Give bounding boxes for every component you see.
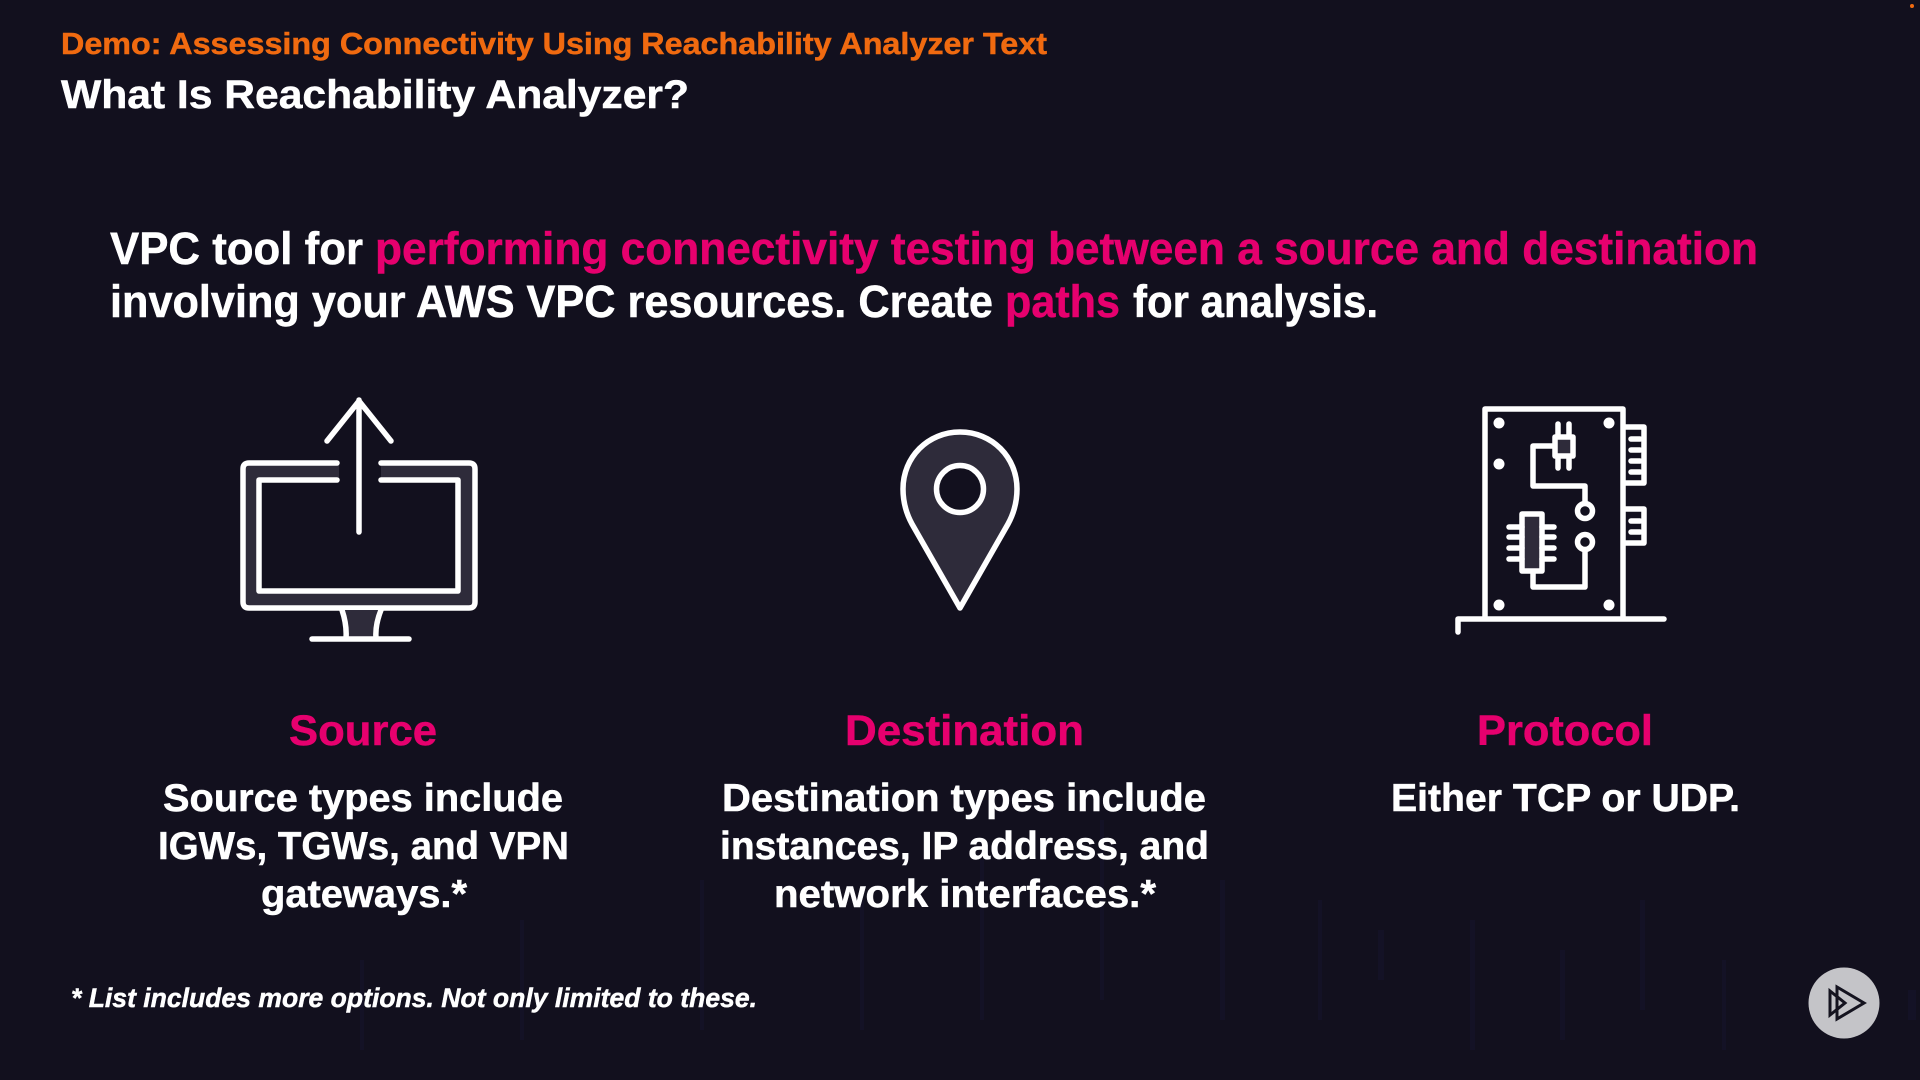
- icon: map pin: [903, 432, 1017, 608]
- panel: source: [158, 707, 569, 916]
- icon: circuit board: [1458, 409, 1664, 632]
- panel: destination: [720, 707, 1209, 916]
- intro text: involving your AWS VPC resources. Create: [110, 276, 993, 327]
- source description: [158, 777, 569, 916]
- destination description: network interfaces.*: [774, 873, 1157, 916]
- footnote: * List includes more options. Not only limited to these.: [71, 983, 757, 1013]
- intro text: paths: [1005, 276, 1120, 327]
- protocol description: Either TCP or UDP.: [1391, 777, 1740, 820]
- destination heading: Destination: [845, 707, 1084, 755]
- destination description: Destination types include: [722, 777, 1206, 820]
- protocol heading: Protocol: [1477, 707, 1653, 755]
- intro text: VPC tool for: [110, 223, 363, 274]
- slide heading: What Is Reachability Analyzer?: [61, 73, 689, 117]
- icon: monitor with upload arrow: [243, 400, 475, 639]
- module title: Demo: Assessing Connectivity Using Reachability Analyzer Text: [61, 26, 1047, 61]
- icon: play logo button: [1808, 968, 1880, 1038]
- source heading: Source: [289, 707, 437, 755]
- source description: IGWs, TGWs, and VPN: [158, 825, 569, 868]
- intro text: [110, 223, 1758, 327]
- intro text: for analysis.: [1133, 276, 1378, 327]
- source description: gateways.*: [261, 873, 468, 916]
- destination description: [720, 777, 1209, 916]
- panel: protocol: [1391, 707, 1740, 820]
- destination description: instances, IP address, and: [720, 825, 1209, 868]
- source description: Source types include: [163, 777, 563, 820]
- intro text: performing connectivity testing between a source and destination: [375, 223, 1758, 274]
